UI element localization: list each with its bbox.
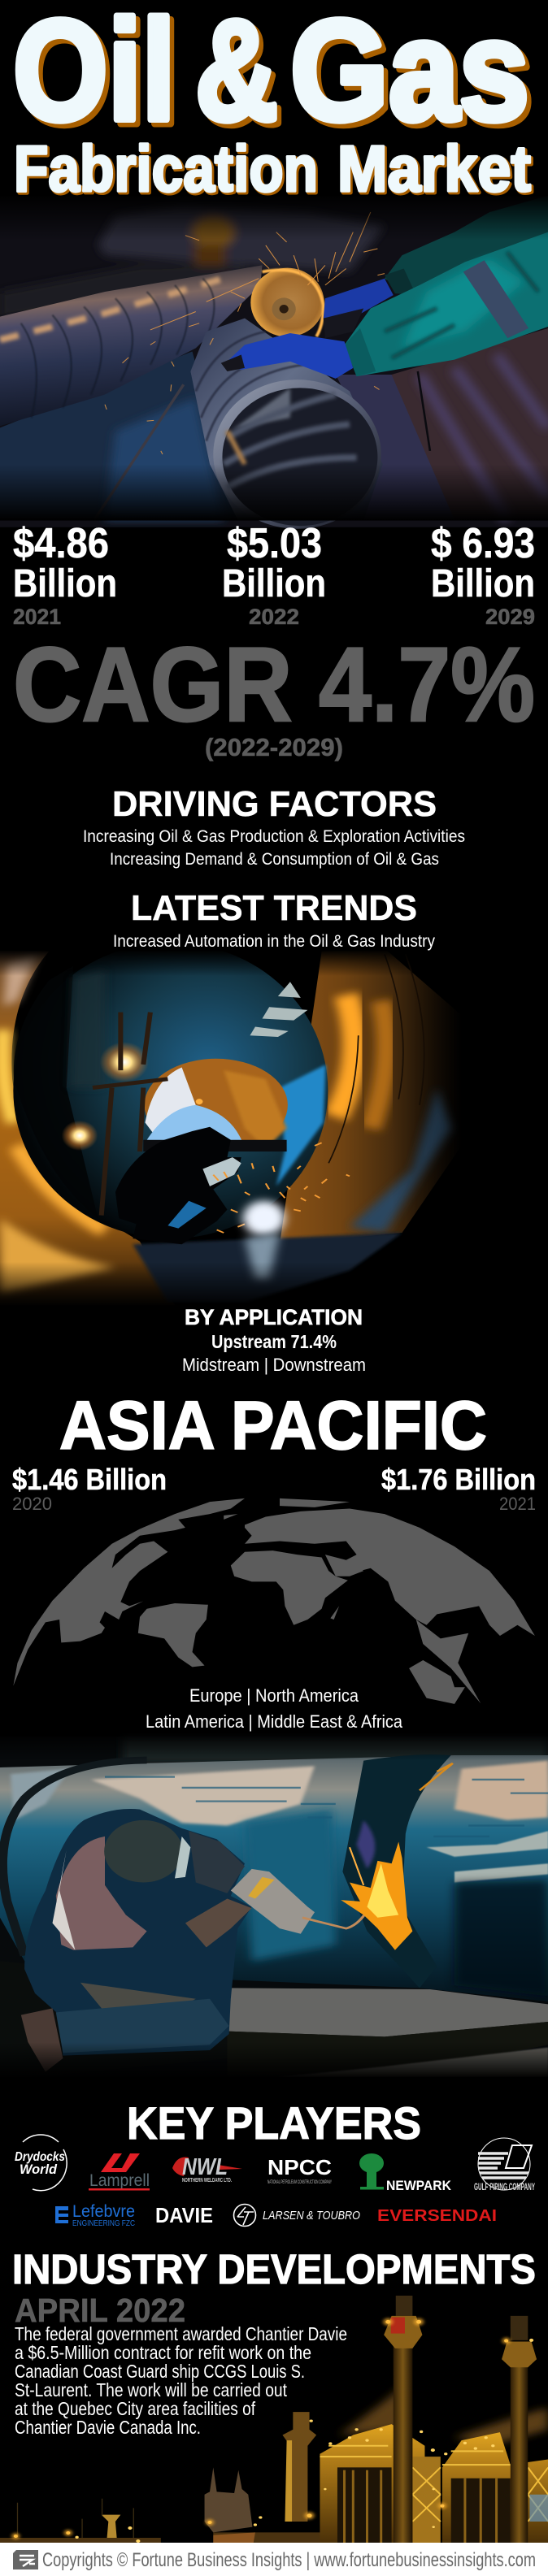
april 2022 development note	[15, 2292, 347, 2438]
regions list: Europe | North America	[189, 1685, 359, 1706]
logo: NWL	[172, 2154, 242, 2184]
sleeves and gloves	[221, 196, 548, 379]
photo: refinery at night	[0, 2296, 548, 2543]
market value 2029: 2029	[485, 605, 535, 629]
market value 2021: $4.86	[13, 520, 109, 567]
april 2022 development note: The federal government awarded Chantier Davie	[15, 2323, 347, 2344]
sparks	[105, 212, 465, 454]
CAGR headline: (2022-2029)	[205, 733, 343, 761]
by application	[182, 1305, 366, 1375]
logo: Lefebvre Engineering	[52, 2202, 135, 2228]
long pipe	[0, 265, 262, 426]
logo: Eversendai: EVERSENDAI	[377, 2207, 497, 2225]
driving factors: Increasing Demand & Consumption of Oil & Gas	[110, 850, 439, 869]
market value 2022	[222, 520, 326, 629]
asia pacific values: $1.76 Billion	[381, 1463, 536, 1496]
driving factors: Increasing Oil & Gas Production & Exploration Activities	[83, 827, 465, 846]
april 2022 development note: St-Laurent. The work will be carried out	[15, 2379, 287, 2400]
title: Market	[339, 134, 533, 206]
logo: NWL: NORTHERN WELDARC LTD.	[182, 2178, 232, 2184]
world map globe	[13, 1498, 535, 1704]
market value 2029: $ 6.93	[431, 520, 535, 567]
logo: Drydocks World: Drydocks	[15, 2150, 65, 2164]
welder silhouette	[115, 1127, 241, 1244]
floor	[0, 328, 548, 520]
grinder disc	[250, 268, 324, 337]
latest trends: Increased Automation in the Oil & Gas Industry	[113, 932, 435, 951]
market value 2022: $5.03	[227, 520, 322, 567]
latest trends	[113, 888, 435, 951]
title	[13, 0, 533, 206]
driving factors: DRIVING FACTORS	[112, 784, 437, 824]
by application: Midstream | Downstream	[182, 1355, 366, 1375]
buildings	[320, 2424, 424, 2543]
market value 2021: 2021	[13, 605, 61, 629]
regions list	[146, 1685, 403, 1732]
market value 2022: Billion	[222, 562, 326, 605]
asia pacific heading: ASIA PACIFIC	[59, 1387, 487, 1464]
logo: Lamprell	[89, 2153, 150, 2191]
market value 2029	[431, 520, 535, 629]
logo: Lefebvre Engineering: ENGINEERING FZC	[72, 2219, 135, 2228]
key players heading: KEY PLAYERS	[127, 2097, 421, 2149]
cable	[2, 1760, 147, 1955]
photo: worker cutting pipeline with torch	[0, 1731, 548, 2099]
logo: Drydocks World	[15, 2135, 67, 2191]
asia pacific values: 2021	[499, 1494, 536, 1514]
logo: Lamprell: Lamprell	[89, 2171, 150, 2190]
title: Fabrication	[15, 134, 320, 206]
market value 2021: Billion	[13, 562, 117, 605]
driving factors	[83, 784, 465, 869]
logo: Davie: DAVIE	[155, 2203, 213, 2227]
logo: Newpark: NEWPARK	[386, 2178, 452, 2193]
torch	[302, 1914, 365, 1928]
footer bar	[0, 2543, 548, 2576]
april 2022 development note: Canadian Coast Guard ship CCGS Louis S.	[15, 2361, 305, 2382]
photo: worker grinding spiral duct pipes	[0, 194, 548, 529]
logo: Gulf Piping Company	[474, 2138, 535, 2192]
latest trends: LATEST TRENDS	[131, 888, 417, 928]
by application: Upstream 71.4%	[211, 1331, 337, 1352]
april 2022 development note: Chantier Davie Canada Inc.	[15, 2417, 201, 2438]
market value 2021	[13, 520, 117, 629]
photo: welder inside large pipe	[0, 943, 548, 1320]
stacks	[394, 2343, 412, 2543]
worker	[24, 1809, 252, 2056]
icon: Fortune Business Insights logo	[13, 2550, 38, 2569]
by application: BY APPLICATION	[185, 1305, 363, 1329]
logo: Drydocks World: World	[20, 2162, 58, 2177]
concrete support	[228, 1988, 548, 2036]
market value 2022: 2022	[249, 605, 299, 629]
logo: Larsen & Toubro	[234, 2204, 360, 2227]
logo: NPCC: NPCC	[267, 2155, 332, 2179]
asia pacific values	[12, 1463, 536, 1514]
logo: NWL: NWL	[182, 2154, 228, 2180]
logo: Lefebvre Engineering: Lefebvre	[72, 2202, 135, 2221]
title: Fabrication	[14, 132, 318, 205]
asia pacific values: $1.46 Billion	[12, 1463, 167, 1496]
logo: Larsen & Toubro: LARSEN & TOUBRO	[263, 2209, 360, 2223]
sparks	[213, 1143, 350, 1233]
regions list: Latin America | Middle East & Africa	[146, 1711, 403, 1732]
april 2022 development note: at the Quebec City area facilities of	[15, 2398, 255, 2419]
asia pacific values: 2020	[12, 1494, 52, 1514]
logo: Newpark	[359, 2153, 452, 2193]
flame	[341, 1842, 412, 1950]
lights	[14, 2320, 533, 2543]
april 2022 development note: a $6.5-Million contract for refit work on the	[15, 2342, 311, 2363]
skyline small	[205, 2467, 252, 2532]
april 2022 development note: APRIL 2022	[15, 2292, 185, 2329]
title: Market	[337, 132, 531, 205]
logo: NPCC: NATIONAL PETROLEUM CONSTRUCTION COMPANY	[267, 2180, 332, 2185]
foreground pipe	[190, 319, 383, 529]
market value 2029: Billion	[431, 562, 535, 605]
